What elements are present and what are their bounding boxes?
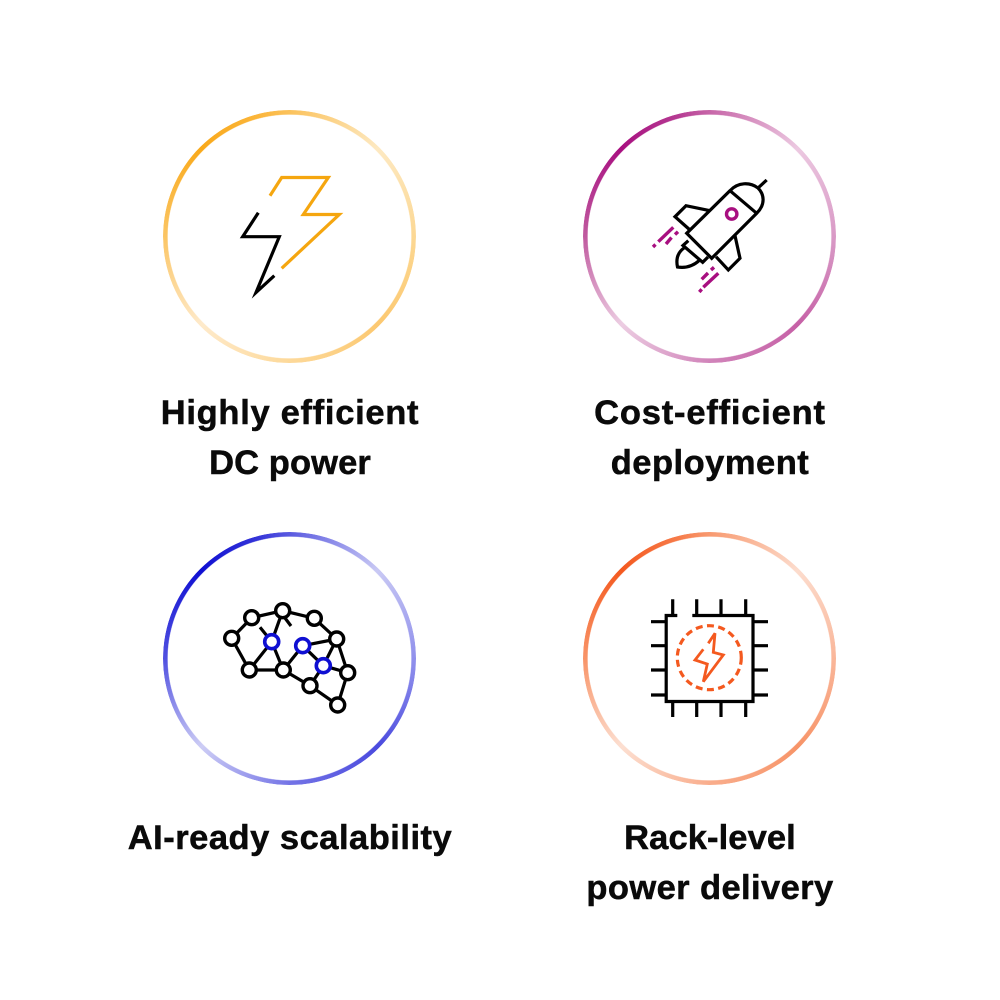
heading: Highly efficient DC power: DC power [209,444,371,482]
heading: Cost-efficient deployment: deployment [611,444,809,482]
heading: Rack-level power delivery [586,819,834,907]
heading: Cost-efficient deployment [594,394,826,482]
icon detail: network nodes [225,604,355,712]
icon detail: dashed circle and bolt [677,626,741,690]
icon detail: rocket window and exhaust [653,209,737,292]
ring: magenta [583,110,836,363]
ring: coral [583,532,836,784]
heading: Rack-level power delivery: Rack-level [624,819,796,857]
heading: AI-ready scalability: AI-ready scalability [128,819,452,857]
ring: blue [163,532,416,784]
heading: Cost-efficient deployment: Cost-efficient [594,394,826,432]
icon detail: highlighted nodes [265,635,330,673]
heading: Highly efficient DC power [161,394,419,482]
ring: orange [163,110,416,363]
heading: Highly efficient DC power: Highly efficient [161,394,419,432]
heading: Rack-level power delivery: power delivery [586,869,834,907]
